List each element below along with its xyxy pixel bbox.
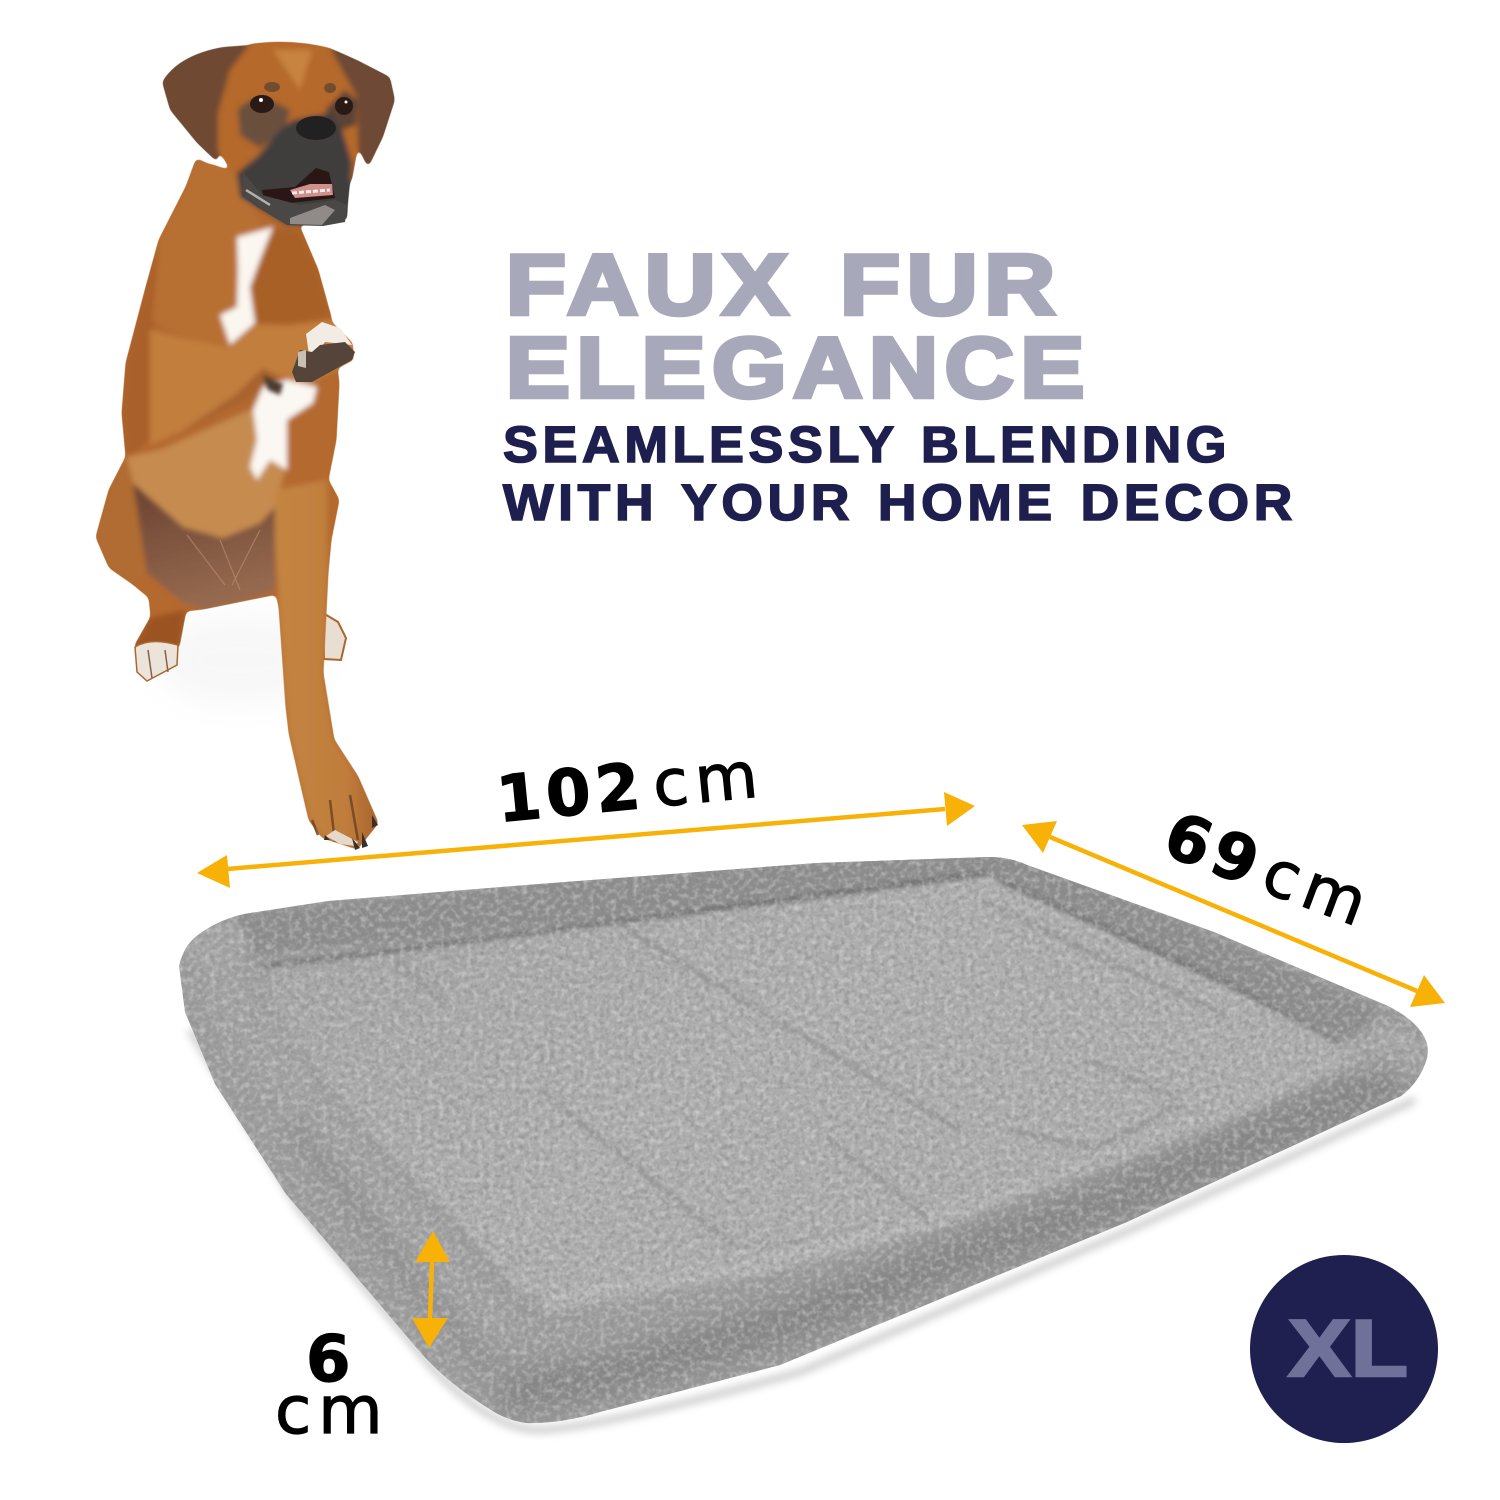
title: faux fur elegance: FAUX FUR (506, 238, 1062, 333)
title: faux fur elegance: ELEGANCE (506, 321, 1091, 416)
label: 69cm: 69 (1154, 799, 1273, 903)
front bolster crest (540, 1050, 1405, 1302)
back bolster (240, 866, 1370, 1028)
label: 102cm: 102 (493, 750, 648, 838)
creases and shading (1000, 880, 1340, 1042)
label: 6cm (275, 1323, 390, 1449)
size badge: XL (1250, 1255, 1438, 1443)
bed base (170, 850, 1440, 1440)
fleece texture (170, 850, 1440, 1440)
quilted seams (396, 900, 1225, 1248)
arrow: depth 69cm (1022, 821, 1445, 1007)
label: 69cm (1154, 799, 1383, 944)
subtitle: SEAMLESSLY BLENDING (503, 416, 1231, 473)
arrow: height 6cm (412, 1231, 450, 1348)
size badge: XL: XL (1288, 1304, 1408, 1394)
dog photo illustration (97, 42, 395, 850)
arrow: width 102cm (197, 792, 975, 888)
title: faux fur elegance (506, 238, 1091, 416)
left bolster (215, 960, 500, 1340)
dog bed (170, 850, 1440, 1440)
subtitle (503, 416, 1297, 531)
bolster corners (1346, 1031, 1424, 1074)
label: 6cm: 6 (306, 1323, 351, 1397)
subtitle: WITH YOUR HOME DECOR (503, 474, 1297, 531)
label: 102cm: cm (650, 738, 768, 823)
bed floor (261, 876, 1349, 1295)
label: 6cm: cm (275, 1372, 390, 1449)
label: 102cm (493, 738, 768, 838)
label: 69cm: cm (1253, 835, 1383, 944)
